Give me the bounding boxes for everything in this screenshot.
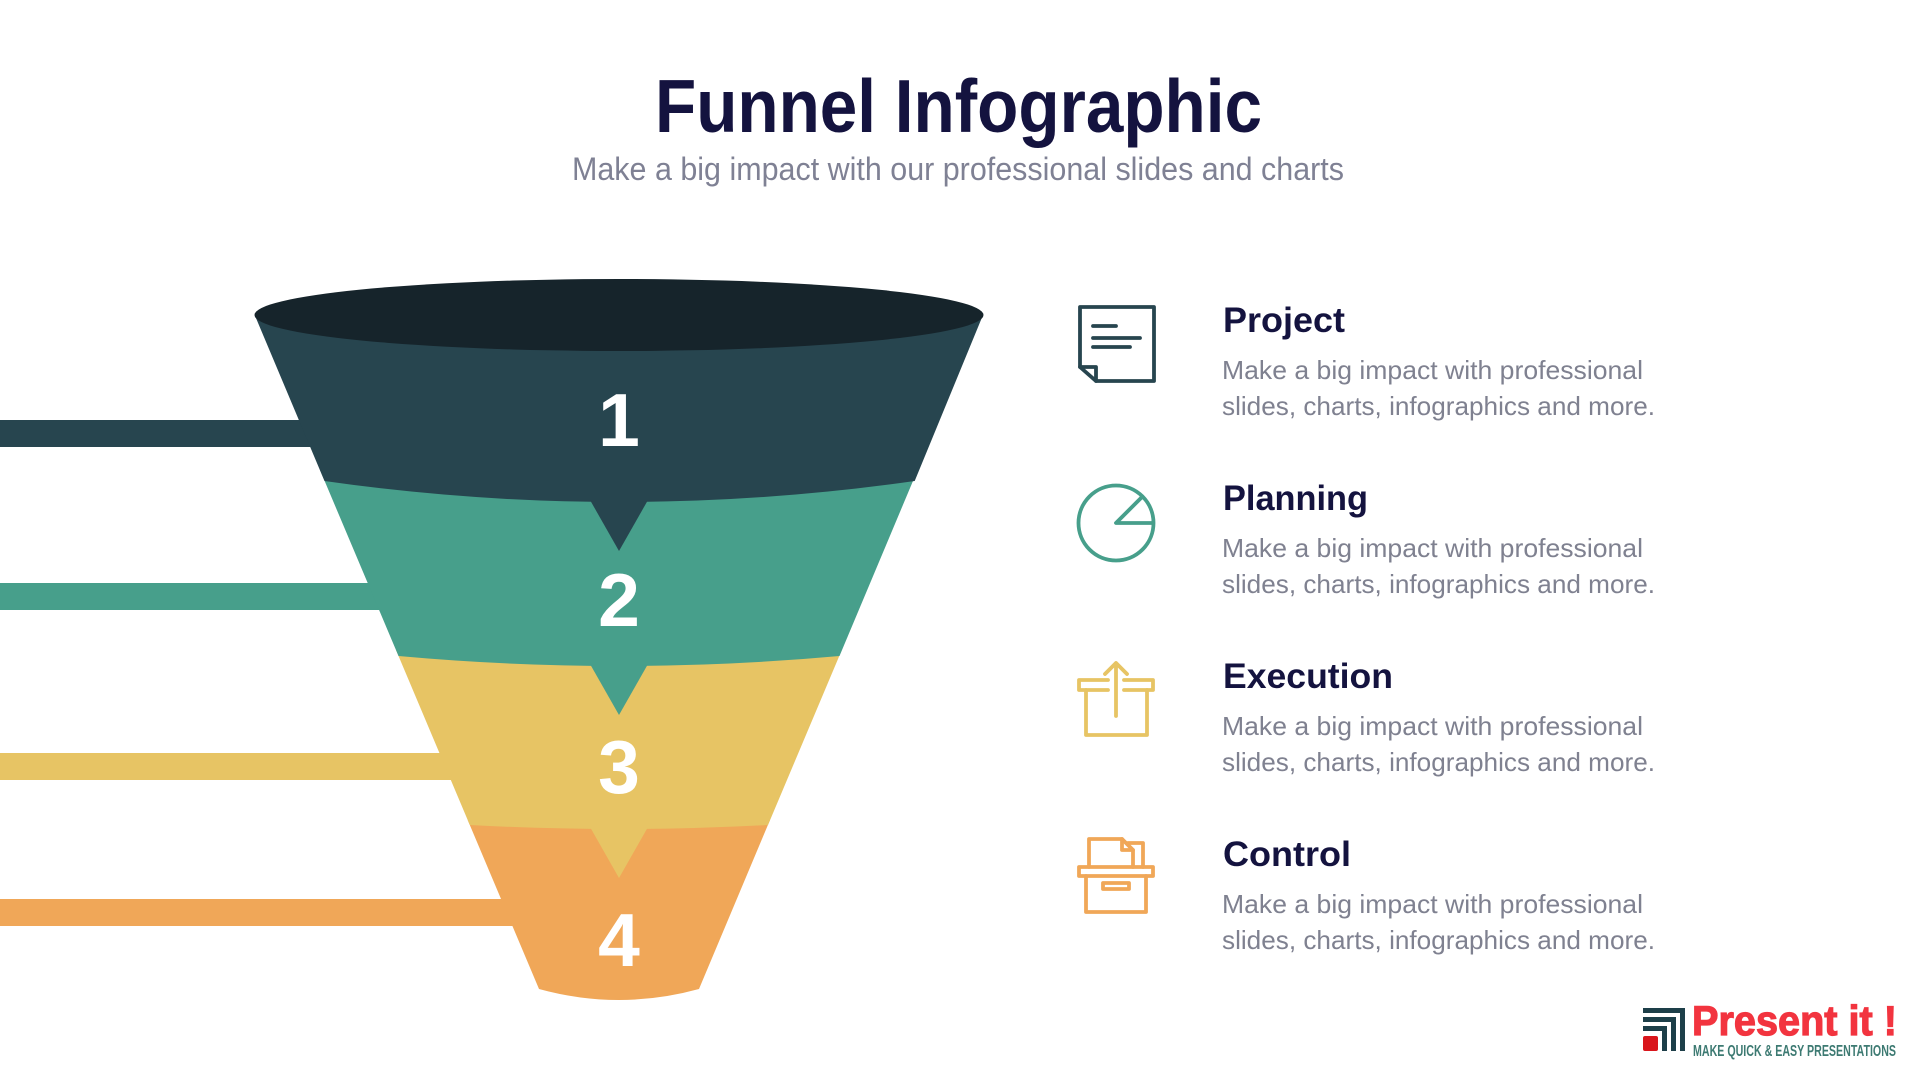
item: Execution xyxy=(1079,657,1655,777)
description: Make a big impact with professional xyxy=(1222,355,1643,385)
heading: Project xyxy=(1223,301,1345,340)
funnel rim xyxy=(254,279,984,351)
item: Project xyxy=(1080,301,1655,421)
number 2: 2 xyxy=(598,558,640,642)
funnel segment 1 xyxy=(255,315,983,551)
subtitle: Make a big impact with our professional slides and charts xyxy=(572,151,1344,187)
icon: archive box xyxy=(1079,839,1153,912)
heading: Execution xyxy=(1223,657,1393,696)
bar 2 xyxy=(0,583,400,610)
funnel segment 3 xyxy=(396,650,842,878)
bar 1 xyxy=(0,420,330,447)
description: slides, charts, infographics and more. xyxy=(1222,569,1655,599)
icon: pie chart xyxy=(1078,486,1154,560)
funnel segment 2 xyxy=(320,470,918,715)
funnel segment 4 xyxy=(468,820,770,1000)
connector bars xyxy=(0,420,530,926)
description: slides, charts, infographics and more. xyxy=(1222,747,1655,777)
description: Make a big impact with professional xyxy=(1222,889,1643,919)
logo name: Present it ! xyxy=(1692,997,1897,1044)
number 1: 1 xyxy=(598,378,640,462)
icon: box with arrow xyxy=(1079,663,1153,735)
number 4: 4 xyxy=(598,898,640,982)
item: Planning xyxy=(1078,479,1655,599)
description: Make a big impact with professional xyxy=(1222,711,1643,741)
description: Make a big impact with professional xyxy=(1222,533,1643,563)
logo mark xyxy=(1643,1008,1685,1051)
bar 4 xyxy=(0,899,530,926)
heading: Control xyxy=(1223,835,1351,874)
title: Funnel Infographic xyxy=(655,64,1262,148)
logo xyxy=(1643,997,1897,1060)
heading: Planning xyxy=(1223,479,1368,518)
description: slides, charts, infographics and more. xyxy=(1222,391,1655,421)
icon: note xyxy=(1080,307,1154,381)
funnel xyxy=(254,279,984,1000)
item: Control xyxy=(1079,835,1655,955)
bar 3 xyxy=(0,753,470,780)
description: slides, charts, infographics and more. xyxy=(1222,925,1655,955)
number 3: 3 xyxy=(598,725,640,809)
